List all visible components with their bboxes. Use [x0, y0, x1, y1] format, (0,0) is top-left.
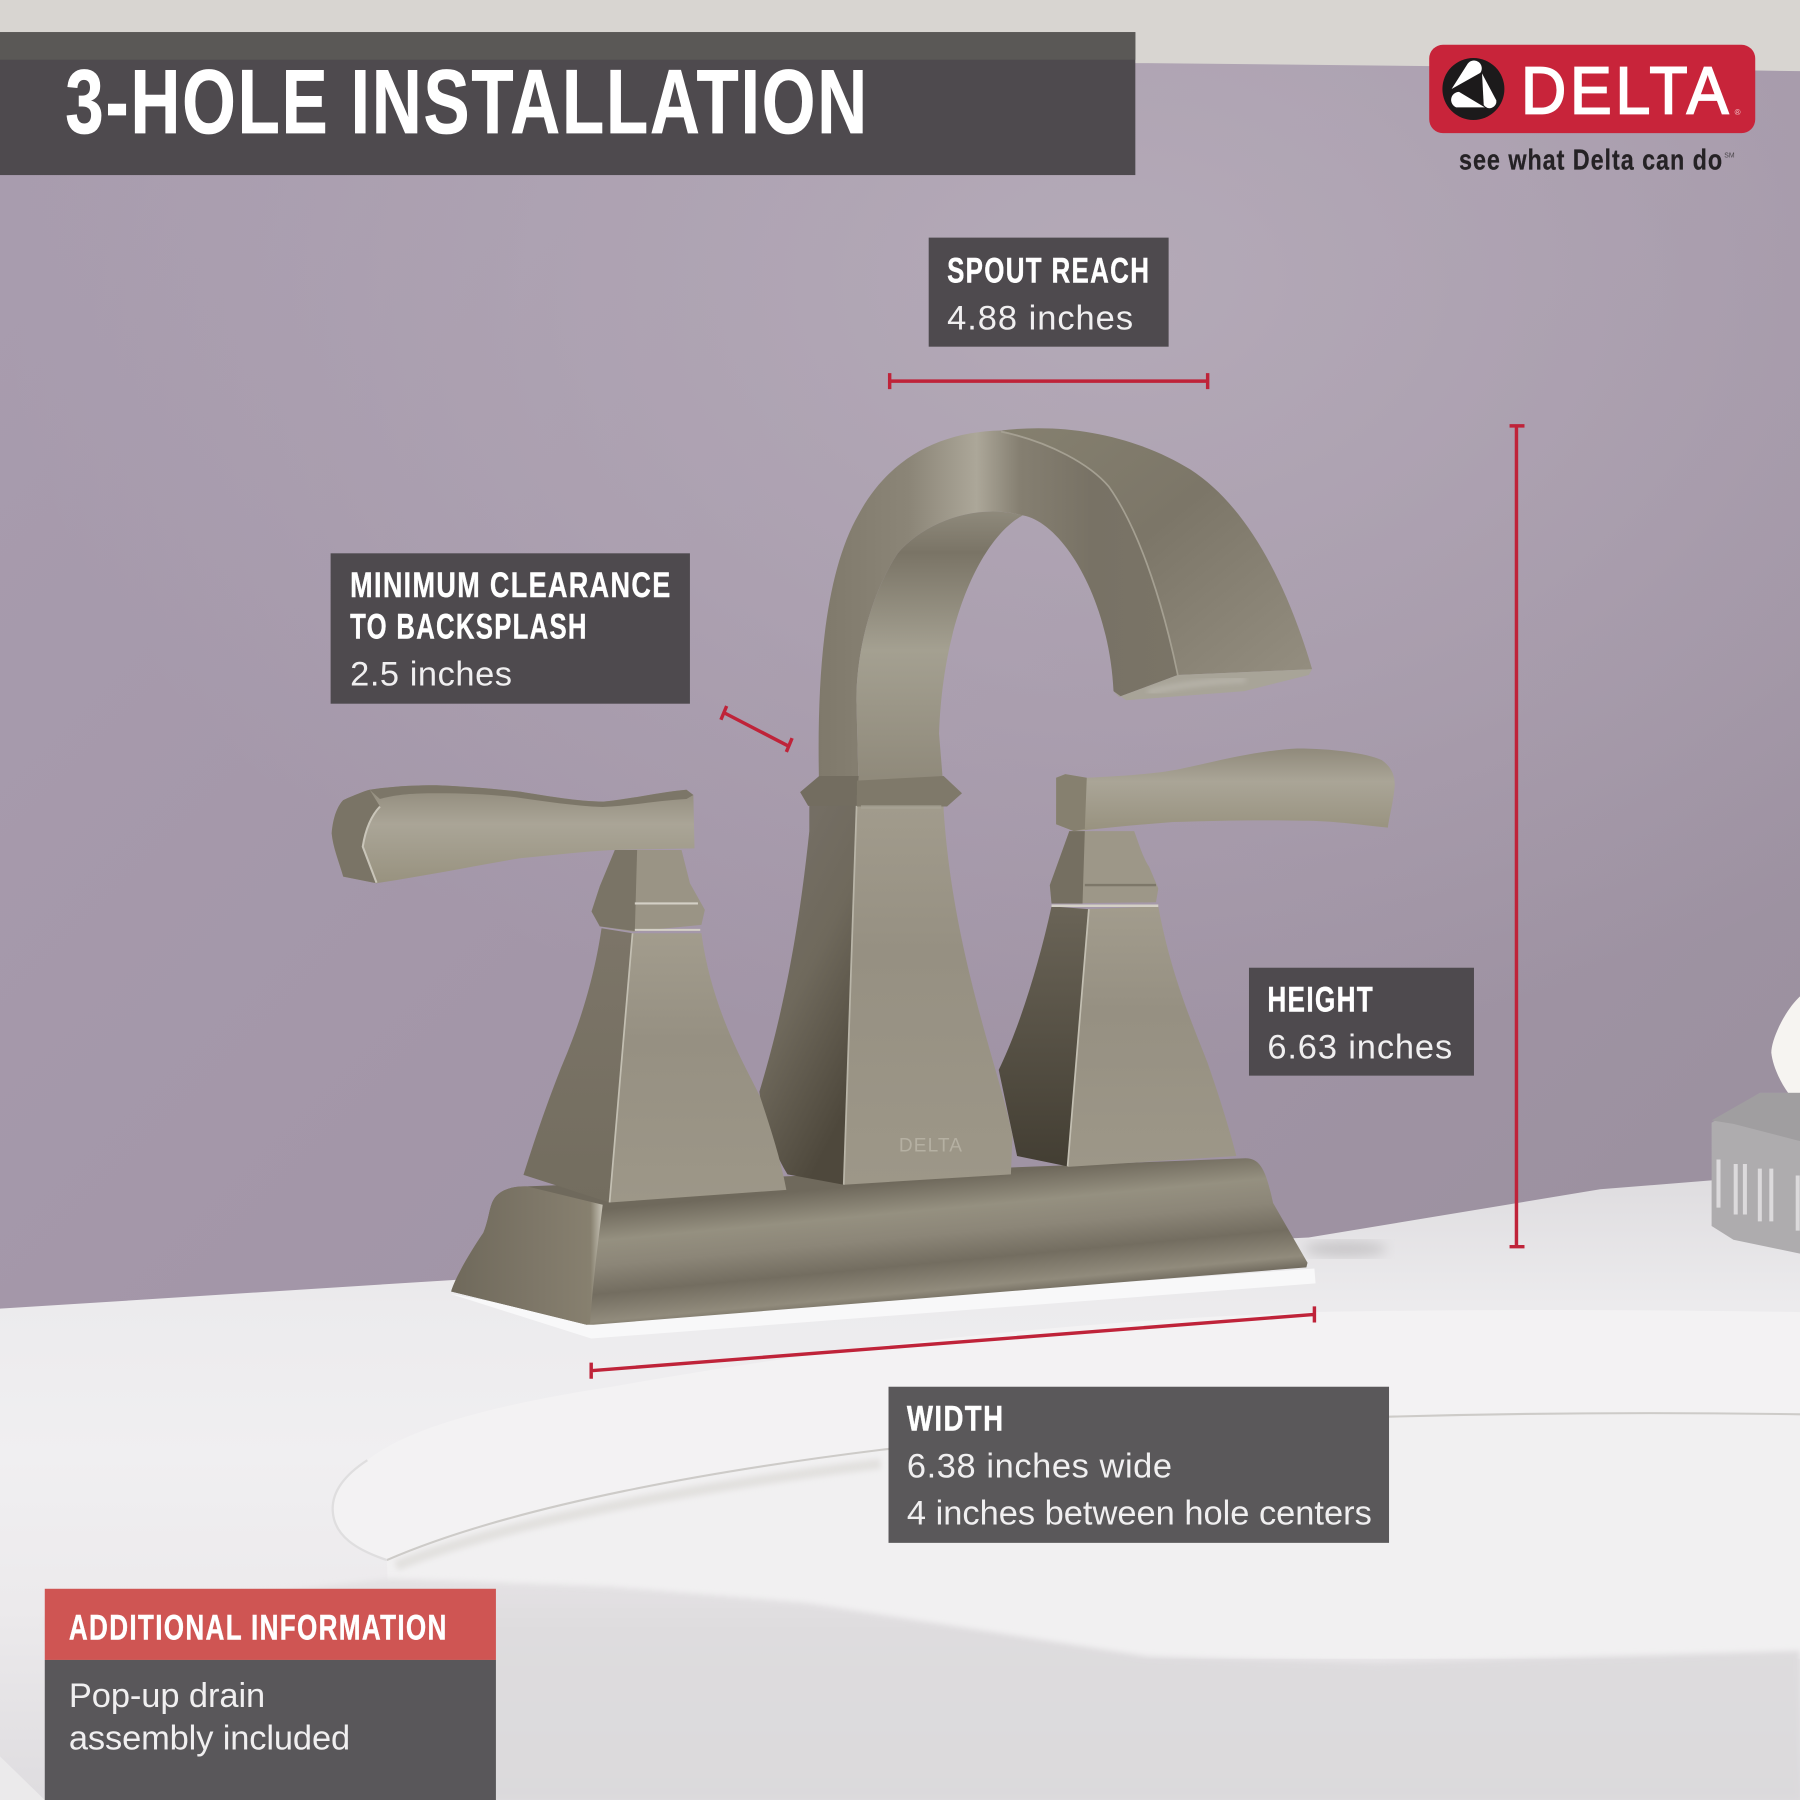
- logo: Delta: SM: [1724, 152, 1735, 159]
- panel: additional information: assembly included: [69, 1719, 350, 1757]
- logo: Delta: DELTA: [1521, 55, 1732, 129]
- dimension: spout reach: [890, 373, 1208, 389]
- callout: height: HEIGHT: [1267, 979, 1374, 1019]
- faucet: logo mark: DELTA: [899, 1134, 963, 1156]
- callout: width: [889, 1387, 1389, 1543]
- panel header: [45, 1589, 496, 1660]
- title bar: [0, 32, 1135, 175]
- faucet: base plate: [451, 1158, 1308, 1325]
- callout: height: 6.63 inches: [1267, 1028, 1452, 1066]
- faucet: [332, 428, 1395, 1339]
- callout: minimum clearance: MINIMUM CLEARANCE: [350, 565, 672, 605]
- faucet: spout: [819, 428, 1312, 790]
- callout: spout reach: 4.88 inches: [947, 299, 1133, 337]
- tagline: see what Delta can do: [1459, 144, 1723, 176]
- dimension: width: [591, 1306, 1314, 1379]
- callout: minimum clearance: TO BACKSPLASH: [350, 606, 588, 646]
- faucet: left handle: [332, 785, 786, 1202]
- spout: main arch: [819, 430, 1178, 790]
- spout: inner band: [856, 512, 1023, 790]
- soap dish and soap: [1712, 996, 1800, 1254]
- callout: minimum clearance: [331, 553, 690, 704]
- spout: aerator tip: [1114, 669, 1312, 700]
- dimension: height: [1510, 426, 1524, 1247]
- dimension: clearance: [721, 706, 792, 752]
- callout: spout reach: SPOUT REACH: [947, 250, 1150, 290]
- panel text: Pop-up drain: [69, 1677, 265, 1715]
- panel heading: ADDITIONAL INFORMATION: [69, 1607, 448, 1647]
- logo: Delta: [1429, 45, 1755, 176]
- panel body: [45, 1660, 496, 1800]
- callout: width: 6.38 inches wide: [907, 1447, 1172, 1485]
- title: 3-HOLE INSTALLATION: [65, 52, 869, 153]
- spout: front face: [1001, 428, 1312, 675]
- faucet: centre body: [759, 776, 1012, 1185]
- faucet: white gasket: [450, 1268, 1316, 1339]
- callout: width: 4 inches between hole centers: [907, 1494, 1372, 1532]
- logo: Delta: ®: [1735, 108, 1741, 117]
- callout: width: WIDTH: [907, 1398, 1004, 1438]
- callout: height: [1249, 968, 1474, 1076]
- callout: minimum clearance: 2.5 inches: [350, 655, 512, 693]
- callout: spout reach: [929, 238, 1169, 347]
- panel: additional information: [45, 1589, 496, 1800]
- faucet: right handle: [999, 748, 1395, 1167]
